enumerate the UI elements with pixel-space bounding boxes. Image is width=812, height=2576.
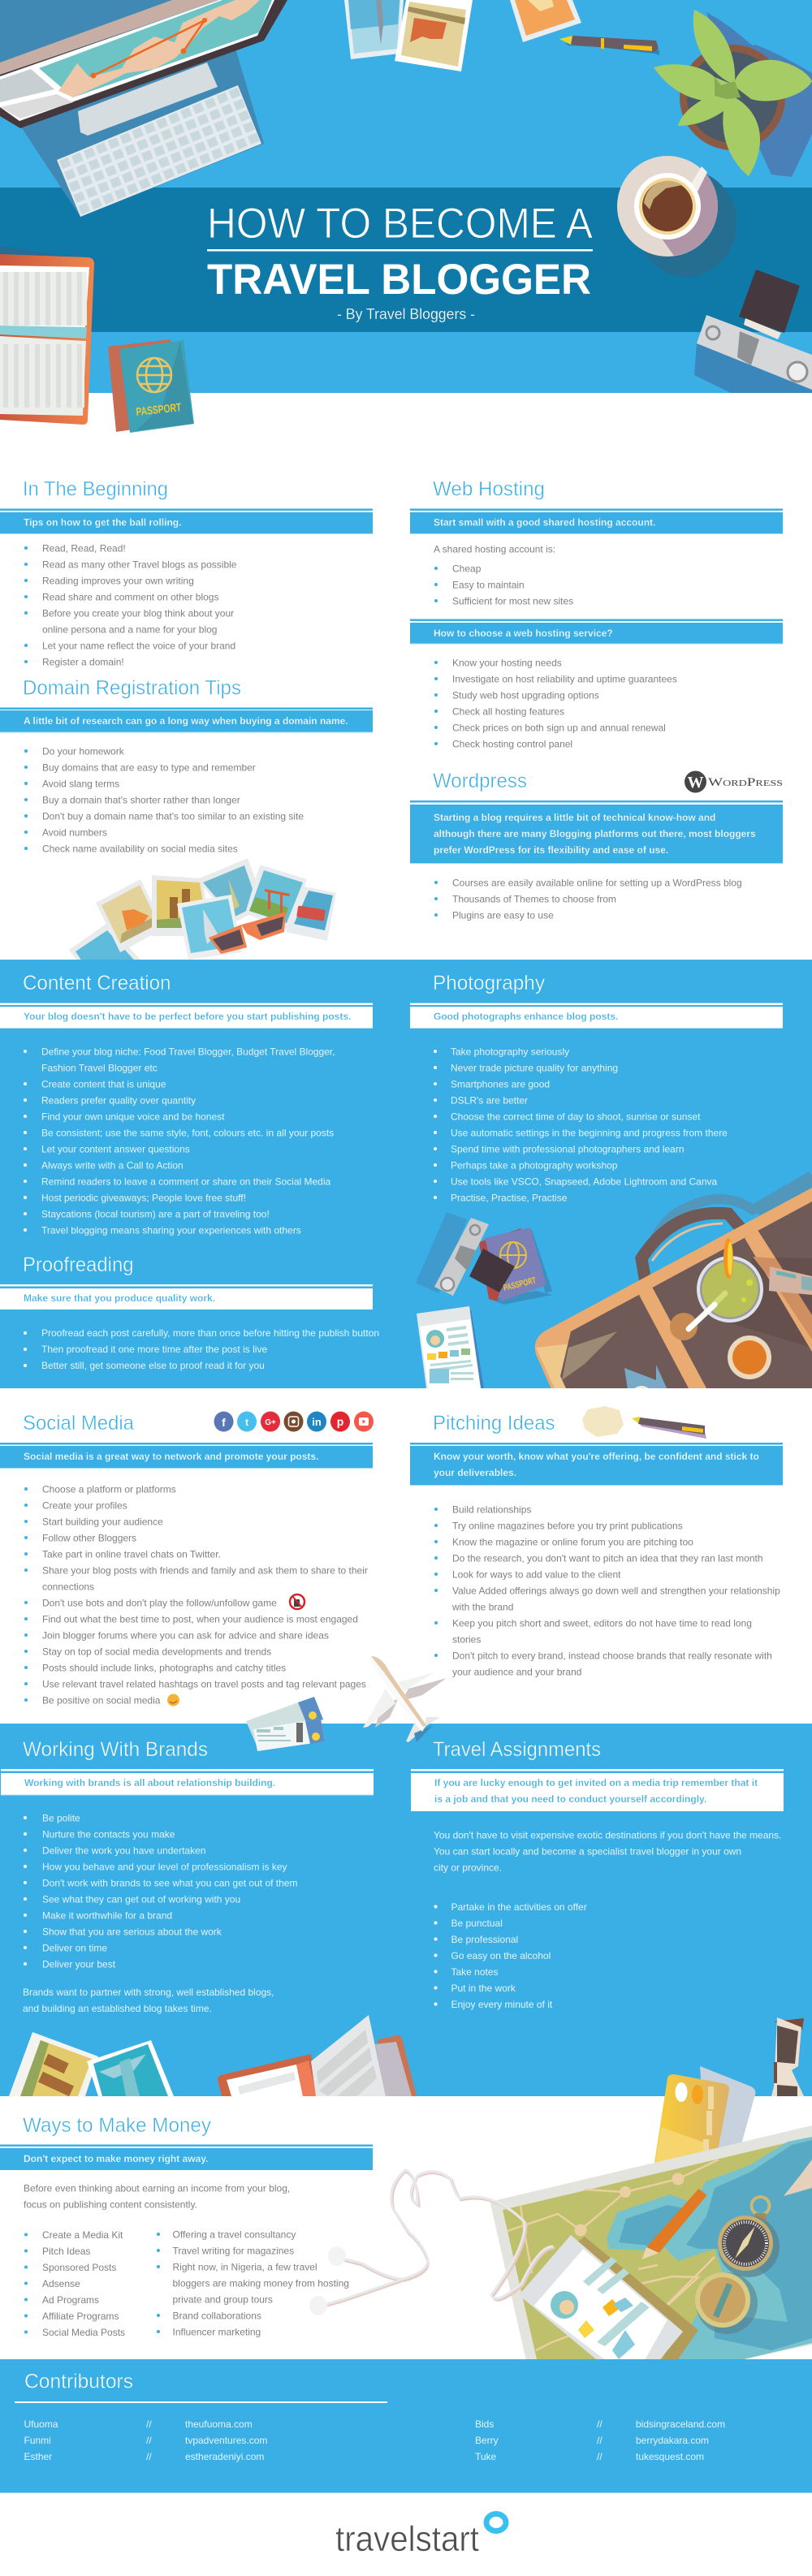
list: Avoid numbers <box>42 826 107 838</box>
illustration: document page <box>417 1306 484 1388</box>
list: Proofread each post carefully, more than once before hitting the publish button <box>41 1327 379 1339</box>
intro text: city or province. <box>434 1862 502 1874</box>
list: Try online magazines before you try print publications <box>452 1520 683 1531</box>
heading: Contributors <box>24 2371 133 2393</box>
subheading bar <box>410 805 783 864</box>
list: Go easy on the alcohol <box>451 1950 551 1961</box>
subheading bar <box>1 1773 374 1796</box>
section background: content <box>0 960 812 1388</box>
illustration: laptop <box>0 0 287 217</box>
subheading bar two: How to choose a web hosting service? <box>434 628 613 639</box>
subheading bar <box>0 1007 373 1029</box>
list: online persona and a name for your blog <box>42 624 217 635</box>
list: Choose a platform or platforms <box>42 1484 176 1495</box>
intro text: You can start locally and become a specialist travel blogger in your own <box>434 1846 741 1858</box>
illustration: hero book <box>0 246 94 425</box>
list: Take notes <box>451 1966 499 1978</box>
list: Use tools like VSCO, Snapseed, Adobe Lightroom and Canva <box>451 1176 718 1187</box>
icon: no bots <box>290 1594 304 1609</box>
list: Do your homework <box>42 745 125 757</box>
list: Show that you are serious about the work <box>42 1926 222 1937</box>
list: Let your name reflect the voice of your brand <box>42 640 235 651</box>
list one: Pitch Ideas <box>42 2246 90 2257</box>
heading: Photography <box>433 972 545 995</box>
icon: crumpled paper <box>582 1406 624 1437</box>
list: DSLR's are better <box>451 1094 528 1106</box>
list two: Travel writing for magazines <box>172 2246 294 2257</box>
contributors right column: tukesquest.com <box>636 2451 704 2462</box>
heading: Travel Assignments <box>433 1738 601 1761</box>
list: Plugins are easy to use <box>452 909 554 921</box>
panel: domain registration tips <box>0 677 373 854</box>
list: Start building your audience <box>42 1517 163 1528</box>
subheading bar: Your blog doesn't have to be perfect before you start publishing posts. <box>24 1011 351 1022</box>
contributors right column: // <box>597 2451 603 2462</box>
list two: Check all hosting features <box>452 706 564 718</box>
subheading bar: A little bit of research can go a long way when buying a domain name. <box>24 715 348 727</box>
subheading bar: If you are lucky enough to get invited on a media trip remember that it <box>434 1777 758 1789</box>
illustration: bottom book <box>218 2015 417 2096</box>
illustration: coffee cup <box>617 156 736 277</box>
contributors right column: berrydakara.com <box>636 2435 709 2446</box>
contributors right column: Berry <box>475 2435 499 2446</box>
list: Don't buy a domain name that's too similar to an existing site <box>42 810 304 822</box>
list: Read share and comment on other blogs <box>42 591 218 602</box>
list: Reading improves your own writing <box>42 575 194 586</box>
list: Buy domains that are easy to type and remember <box>42 762 256 773</box>
closing text <box>23 1987 274 2014</box>
list: Create content that is unique <box>41 1078 166 1090</box>
heading: Domain Registration Tips <box>23 677 241 700</box>
list two <box>157 2229 349 2338</box>
list: Travel blogging means sharing your experiences with others <box>41 1224 301 1236</box>
subheading bar: prefer WordPress for its flexibility and ease of use. <box>434 844 668 856</box>
panel: wordpress <box>410 770 783 921</box>
icon: wordpress logo: WordPress <box>708 776 783 789</box>
list: Easy to maintain <box>452 580 525 591</box>
illustration: earphones <box>309 2170 554 2315</box>
heading: Web Hosting <box>433 477 545 500</box>
heading: Pitching Ideas <box>433 1412 555 1435</box>
heading: Social Media <box>23 1412 134 1435</box>
panel: travel assignments <box>411 1738 784 2010</box>
contributors left column: theufuoma.com <box>185 2419 253 2430</box>
list: Before you create your blog think about your <box>42 607 234 619</box>
list one: Create a Media Kit <box>42 2229 123 2241</box>
list: Always write with a Call to Action <box>41 1159 184 1171</box>
heading: Wordpress <box>433 770 527 792</box>
contributors right column: bidsingraceland.com <box>636 2419 725 2430</box>
illustration: airplane <box>363 1656 447 1742</box>
list <box>24 542 237 667</box>
list: Register a domain! <box>42 656 124 667</box>
panel: proofreading <box>0 1253 379 1371</box>
list: See what they can get out of working with you <box>42 1893 240 1905</box>
list two: Right now, in Nigeria, a few travel <box>172 2262 317 2273</box>
list two: Study web host upgrading options <box>452 690 599 701</box>
panel: photography <box>410 972 783 1203</box>
illustration: bottom photos <box>9 2032 174 2096</box>
panel: social media <box>0 1411 374 1707</box>
list: Sufficient for most new sites <box>452 596 573 607</box>
list: Practise, Practise, Practise <box>451 1192 568 1203</box>
list: Read, Read, Read! <box>42 542 126 554</box>
list: Be positive on social media <box>42 1695 161 1707</box>
list: Create your profiles <box>42 1500 127 1512</box>
subheading bar <box>0 1288 373 1310</box>
list <box>24 1327 379 1371</box>
list one: Affiliate Programs <box>42 2311 119 2322</box>
list: Never trade picture quality for anything <box>451 1062 618 1073</box>
list: Define your blog niche: Food Travel Blogger, Budget Travel Blogger, <box>41 1046 335 1057</box>
illustration: hero passport <box>108 339 194 433</box>
list: Don't use bots and don't play the follow/unfollow game <box>42 1598 277 1609</box>
contributors left column: tvpadventures.com <box>185 2435 267 2446</box>
list: Do the research, you don't want to pitch an idea that they ran last month <box>452 1552 763 1564</box>
icons: social networks <box>214 1411 374 1432</box>
list: Deliver on time <box>42 1942 107 1953</box>
list: Take part in online travel chats on Twitter. <box>42 1549 221 1560</box>
contributors right column <box>475 2419 725 2462</box>
section: ways to make money background <box>0 2096 812 2359</box>
subheading bar: Social media is a great way to network and promote your posts. <box>24 1451 318 1462</box>
list: Put in the work <box>451 1983 516 1994</box>
list <box>24 1484 368 1707</box>
list two: Offering a travel consultancy <box>172 2229 296 2241</box>
title block <box>207 200 594 322</box>
list: Spend time with professional photographers and learn <box>451 1143 685 1154</box>
list: Build relationships <box>452 1504 531 1515</box>
contributors left column: // <box>146 2419 152 2430</box>
subheading bar: Make sure that you produce quality work. <box>24 1292 215 1304</box>
list: Know the magazine or online forum you are pitching too <box>452 1536 693 1547</box>
list two: Brand collaborations <box>172 2311 261 2322</box>
list <box>24 1812 297 1970</box>
closing text: and building an established blog takes time. <box>23 2003 212 2014</box>
list: your audience and your brand <box>452 1666 581 1677</box>
list: Buy a domain that's shorter rather than longer <box>42 794 240 805</box>
list: Read as many other Travel blogs as possible <box>42 559 237 570</box>
subheading bar <box>0 512 373 534</box>
list two: bloggers are making money from hosting <box>172 2278 349 2289</box>
list: Keep you pitch short and sweet, editors do not have time to read long <box>452 1617 752 1629</box>
icons: social networks: G+ <box>265 1418 276 1427</box>
list one: Social Media Posts <box>42 2327 125 2338</box>
list two: Influencer marketing <box>172 2327 261 2338</box>
panel: content creation <box>0 972 373 1236</box>
title line two: TRAVEL BLOGGER <box>207 256 591 304</box>
closing text: Brands want to partner with strong, well established blogs, <box>23 1987 274 1998</box>
list <box>434 877 742 921</box>
subheading bar: Working with brands is all about relationship building. <box>24 1777 275 1789</box>
subheading bar <box>0 2148 373 2170</box>
intro text: Before even thinking about earning an income from your blog, <box>24 2182 290 2194</box>
list: connections <box>42 1581 94 1593</box>
list: Perhaps take a photography workshop <box>451 1159 618 1171</box>
list: Staycations (local tourism) are a part of traveling too! <box>41 1208 270 1219</box>
list two: Investigate on host reliability and uptime guarantees <box>452 674 677 685</box>
list: Find out what the best time to post, when your audience is most engaged <box>42 1614 358 1625</box>
illustration: bottom sunglasses <box>771 2017 804 2096</box>
illustration: scattered photos and sunglasses <box>69 858 336 966</box>
list: Make it worthwhile for a brand <box>42 1909 172 1921</box>
list: with the brand <box>451 1601 513 1612</box>
list: Courses are easily available online for setting up a WordPress blog <box>452 877 742 888</box>
list: Better still, get someone else to proof read it for you <box>41 1360 265 1371</box>
list two <box>434 658 677 750</box>
illustration: suitcase <box>535 1176 812 1407</box>
illustration: map <box>490 2125 812 2359</box>
list: Thousands of Themes to choose from <box>452 893 616 904</box>
list one: Ad Programs <box>42 2294 99 2306</box>
section background: brands <box>0 1724 812 2096</box>
illustration: camera and passport <box>416 1212 552 1305</box>
intro text <box>24 2182 290 2210</box>
intro text: A shared hosting account is: <box>434 544 555 555</box>
contributors right column: // <box>597 2435 603 2446</box>
contributors left column <box>24 2419 267 2462</box>
icons: social networks: in <box>312 1416 322 1428</box>
list: Remind readers to leave a comment or share on their Social Media <box>41 1176 331 1187</box>
list: Use automatic settings in the beginning and progress from there <box>451 1127 728 1138</box>
list: Avoid slang terms <box>42 778 119 789</box>
list: Host periodic giveaways; People love free stuff! <box>41 1192 246 1203</box>
panel: working with brands <box>1 1738 374 2014</box>
list <box>434 1901 587 2010</box>
illustration: plant <box>654 10 812 177</box>
list: Take photography seriously <box>451 1046 569 1057</box>
intro text: You don't have to visit expensive exotic destinations if you don't have the means. <box>434 1830 781 1841</box>
list: Deliver the work you have undertaken <box>42 1845 205 1856</box>
list: Find your own unique voice and be honest <box>41 1111 225 1122</box>
subheading bar <box>411 1773 784 1811</box>
list: Look for ways to add value to the client <box>452 1568 621 1580</box>
list: How you behave and your level of professionalism is key <box>42 1861 287 1872</box>
list <box>24 745 304 854</box>
list: Value Added offerings always go down well and strengthen your relationship <box>452 1585 780 1596</box>
subheading bar: your deliverables. <box>434 1467 516 1478</box>
illustration: pen <box>559 36 659 55</box>
hero background <box>0 0 812 393</box>
list: Then proofread it one more time after the post is live <box>41 1344 267 1355</box>
heading: Working With Brands <box>23 1738 208 1761</box>
icons: social networks: f <box>222 1416 226 1429</box>
subheading bar: Know your worth, know what you're offering, be confident and stick to <box>434 1451 759 1462</box>
list: Readers prefer quality over quantity <box>41 1094 196 1106</box>
list one <box>24 2229 125 2338</box>
illustration: hero camera <box>694 270 812 393</box>
list two: Check prices on both sign up and annual renewal <box>452 723 666 734</box>
list: Posts should include links, photographs and catchy titles <box>42 1663 286 1674</box>
list: Be punctual <box>451 1918 503 1929</box>
list two: Check hosting control panel <box>452 739 572 750</box>
list: Enjoy every minute of it <box>451 1999 553 2010</box>
list: Be polite <box>42 1812 80 1823</box>
subheading bar: Tips on how to get the ball rolling. <box>24 516 181 528</box>
subheading bar <box>410 512 783 534</box>
list: Join blogger forums where you can ask for advice and share ideas <box>42 1630 329 1642</box>
contributors left column: estheradeniyi.com <box>185 2451 264 2462</box>
contributors left column: // <box>146 2451 152 2462</box>
icons: social networks: p <box>337 1415 343 1428</box>
list: Be consistent; use the same style, font, colours etc. in all your posts <box>41 1127 334 1138</box>
title line one: HOW TO BECOME A <box>207 200 594 248</box>
list: Don't pitch to every brand, instead choose brands that really resonate with <box>452 1650 772 1661</box>
panel: ways to make money <box>0 2114 373 2338</box>
contributors left column: Esther <box>24 2451 52 2462</box>
list: Smartphones are good <box>451 1078 550 1090</box>
subheading bar two <box>410 623 783 645</box>
icon: smiley <box>167 1694 179 1707</box>
list two: private and group tours <box>172 2294 273 2306</box>
list: Partake in the activities on offer <box>451 1901 587 1913</box>
heading: Content Creation <box>23 972 171 995</box>
contributors right column: Tuke <box>475 2451 497 2462</box>
icon: pen <box>632 1417 706 1439</box>
subheading bar <box>0 1446 373 1469</box>
list one: Sponsored Posts <box>42 2262 116 2273</box>
panel: in the beginning <box>0 477 373 667</box>
list: Nurture the contacts you make <box>42 1828 175 1840</box>
list: Share your blog posts with friends and family and ask them to share to their <box>42 1565 368 1577</box>
subheading bar: is a job and that you need to conduct yourself accordingly. <box>434 1793 706 1805</box>
list <box>434 563 573 607</box>
subtitle: - By Travel Bloggers - <box>337 306 475 322</box>
intro text: focus on publishing content consistently. <box>24 2198 197 2210</box>
list: Cheap <box>452 563 482 575</box>
heading: Proofreading <box>23 1253 133 1276</box>
list: Fashion Travel Blogger etc <box>41 1062 158 1073</box>
subheading bar: although there are many Blogging platforms out there, most bloggers <box>434 828 756 839</box>
illustration: bank cards <box>654 2066 755 2168</box>
icon: wordpress logo <box>685 771 783 792</box>
contributors left column: // <box>146 2435 152 2446</box>
illustration: hero passport: PASSPORT <box>136 400 182 418</box>
list: Let your content answer questions <box>41 1143 190 1154</box>
logo: travelstart: travelstart <box>335 2519 479 2559</box>
panel: pitching ideas <box>410 1406 783 1677</box>
contributors left column: Funmi <box>24 2435 51 2446</box>
icons: social networks: t <box>245 1417 248 1428</box>
panel: contributors <box>0 2359 812 2492</box>
icon: wordpress logo: W <box>687 774 703 792</box>
panel: web hosting <box>410 477 783 750</box>
subheading bar <box>410 1007 783 1029</box>
list: Stay on top of social media developments and trends <box>42 1646 271 1658</box>
list: Follow other Bloggers <box>42 1533 136 1544</box>
list two: Know your hosting needs <box>452 658 562 669</box>
contributors right column: // <box>597 2419 603 2430</box>
subheading bar: Starting a blog requires a little bit of technical know-how and <box>434 812 715 823</box>
list: Be professional <box>451 1934 518 1945</box>
heading: Ways to Make Money <box>23 2114 211 2137</box>
list: Deliver your best <box>42 1958 116 1970</box>
illustration: boarding passes <box>246 1697 325 1751</box>
list: stories <box>452 1633 481 1645</box>
list: Don't work with brands to see what you can get out of them <box>42 1877 297 1888</box>
subheading bar <box>0 710 373 732</box>
list: Choose the correct time of day to shoot, sunrise or sunset <box>451 1111 701 1122</box>
subheading bar: Start small with a good shared hosting account. <box>434 516 655 528</box>
list <box>434 1504 780 1677</box>
list <box>24 1046 335 1236</box>
list: Use relevant travel related hashtags on travel posts and tag relevant pages <box>42 1679 366 1690</box>
illustration: hero photos <box>344 0 581 71</box>
illustration: camera and passport: PASSPORT <box>503 1275 538 1293</box>
list one: Adsense <box>42 2278 80 2289</box>
subheading bar <box>410 1446 783 1486</box>
contributors left column: Ufuoma <box>24 2419 58 2430</box>
list: Check name availability on social media sites <box>42 843 238 854</box>
contributors right column: Bids <box>475 2419 494 2430</box>
subheading bar: Don't expect to make money right away. <box>24 2153 208 2164</box>
intro text <box>434 1830 781 1874</box>
heading: In The Beginning <box>23 477 168 500</box>
subheading bar: Good photographs enhance blog posts. <box>434 1011 618 1022</box>
list <box>434 1046 728 1203</box>
